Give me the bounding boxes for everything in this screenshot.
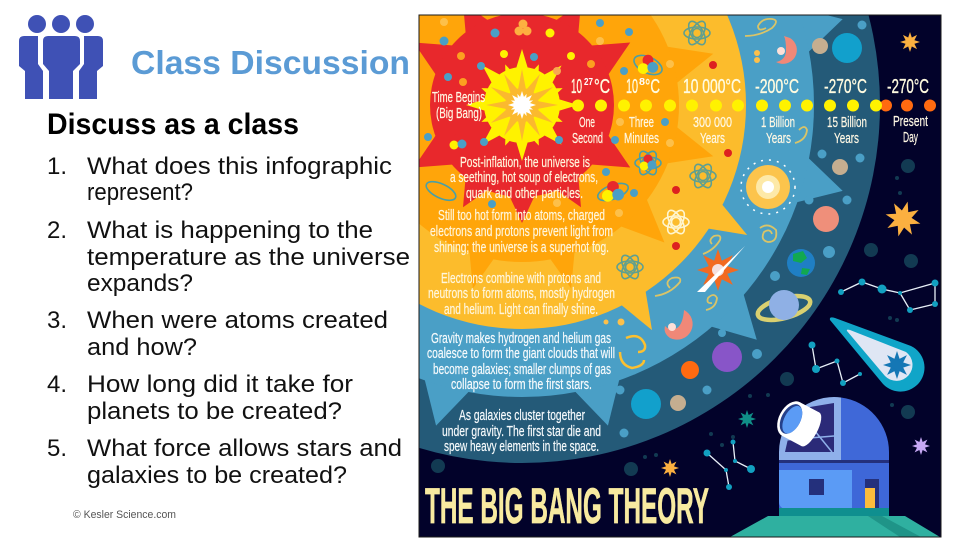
- icon: earth: [787, 249, 815, 277]
- time labels: Three: [629, 114, 654, 131]
- timeline description text: coalesce to form the giant clouds that will: [427, 345, 615, 362]
- time labels: [432, 89, 929, 147]
- numbered question list: 2.: [47, 217, 67, 244]
- timeline description text: [427, 154, 615, 455]
- temperatures: 10: [571, 76, 582, 98]
- timeline description text: collapse to form the first stars.: [451, 376, 592, 393]
- icon: comet: [830, 317, 925, 392]
- numbered question list: and how?: [87, 334, 197, 361]
- numbered question list: 5.: [47, 435, 67, 462]
- time labels: 1 Billion: [761, 114, 795, 131]
- temperatures: 10 000°C: [683, 76, 741, 98]
- icon: central big bang sun: [466, 49, 578, 161]
- temperatures: 27: [584, 77, 593, 88]
- time labels: Present: [893, 113, 929, 130]
- numbered question list: galaxies to be created?: [87, 462, 347, 489]
- numbered question list: temperature as the universe: [87, 244, 410, 271]
- timeline description text: a seething, hot soup of electrons,: [450, 169, 598, 186]
- icon: observatory: [730, 397, 940, 537]
- timeline description text: electrons and protons prevent light from: [430, 223, 613, 240]
- timeline description text: neutrons to form atoms, mostly hydrogen: [428, 285, 615, 302]
- timeline description text: As galaxies cluster together: [459, 407, 585, 424]
- time labels: Minutes: [624, 130, 659, 147]
- particles on red burst: [440, 20, 595, 150]
- numbered question list: 4.: [47, 371, 67, 398]
- icon: exploding star: [697, 246, 745, 292]
- timeline description text: and helium. Light can finally shine.: [444, 301, 598, 318]
- time labels: Years: [700, 130, 725, 147]
- time labels: 15 Billion: [827, 114, 867, 131]
- timeline description text: Electrons combine with protons and: [441, 270, 601, 287]
- timeline description text: under gravity. The first star die and: [442, 423, 601, 440]
- timeline description text: Still too hot form into atoms, charged: [438, 207, 605, 224]
- temperatures: -270°C: [887, 76, 929, 98]
- numbered question list: What force allows stars and: [87, 435, 402, 462]
- timeline description text: Post-inflation, the universe is: [460, 154, 590, 171]
- constellations: [704, 278, 938, 490]
- time labels: (Big Bang): [436, 105, 482, 122]
- time labels: Years: [766, 130, 791, 147]
- time labels: Day: [903, 129, 918, 146]
- time labels: One: [579, 114, 595, 131]
- title: Class Discussion: Class Discussion: [131, 44, 410, 81]
- temperatures: °C: [594, 76, 610, 98]
- time labels: Second: [572, 130, 603, 147]
- starfield: [431, 159, 918, 476]
- heading: Discuss as a class: Discuss as a class: [47, 108, 299, 141]
- temperatures: -270°C: [824, 76, 867, 98]
- infographic: the big bang theory: [420, 16, 940, 536]
- icon: group of people: [19, 15, 103, 99]
- time labels: Years: [834, 130, 859, 147]
- timeline description text: Gravity makes hydrogen and helium gas: [431, 330, 611, 347]
- numbered question list: What does this infographic: [87, 153, 392, 180]
- temperatures: 10: [626, 76, 638, 98]
- cosmic rings: [420, 16, 880, 463]
- time labels: Time Begins: [432, 89, 485, 106]
- atoms on yellow ring: [617, 19, 732, 281]
- red burst: [420, 16, 630, 223]
- timeline description text: quark and other particles.: [466, 185, 583, 202]
- numbered question list: 1.: [47, 153, 67, 180]
- numbered question list: 3.: [47, 307, 67, 334]
- particles on orange ring: [424, 18, 674, 217]
- numbered question list: expands?: [87, 270, 193, 297]
- stars: [661, 32, 930, 477]
- temperatures: -200°C: [755, 76, 799, 98]
- icon: saturn: [755, 290, 813, 325]
- numbered question list: represent?: [87, 179, 193, 206]
- planets on dark ring: [616, 20, 866, 438]
- numbered question list: How long did it take for: [87, 371, 353, 398]
- timeline description text: become galaxies; smaller clumps of gas: [433, 361, 611, 378]
- numbered question list: When were atoms created: [87, 307, 388, 334]
- timeline description text: shining; the universe is a superhot fog.: [434, 239, 609, 256]
- timeline description text: spew heavy elements in the space.: [444, 438, 599, 455]
- copyright footer: © Kesler Science.com: [73, 509, 176, 521]
- galaxies and swirls on blue ring: [604, 19, 807, 368]
- temperatures: [572, 78, 929, 94]
- time labels: 300 000: [693, 114, 732, 131]
- numbered question list: [47, 153, 410, 489]
- numbered question list: What is happening to the: [87, 217, 373, 244]
- numbered question list: planets to be created?: [87, 398, 342, 425]
- temperatures: 8: [639, 77, 645, 88]
- temperature dots: [572, 100, 936, 112]
- temperatures: °C: [645, 76, 660, 98]
